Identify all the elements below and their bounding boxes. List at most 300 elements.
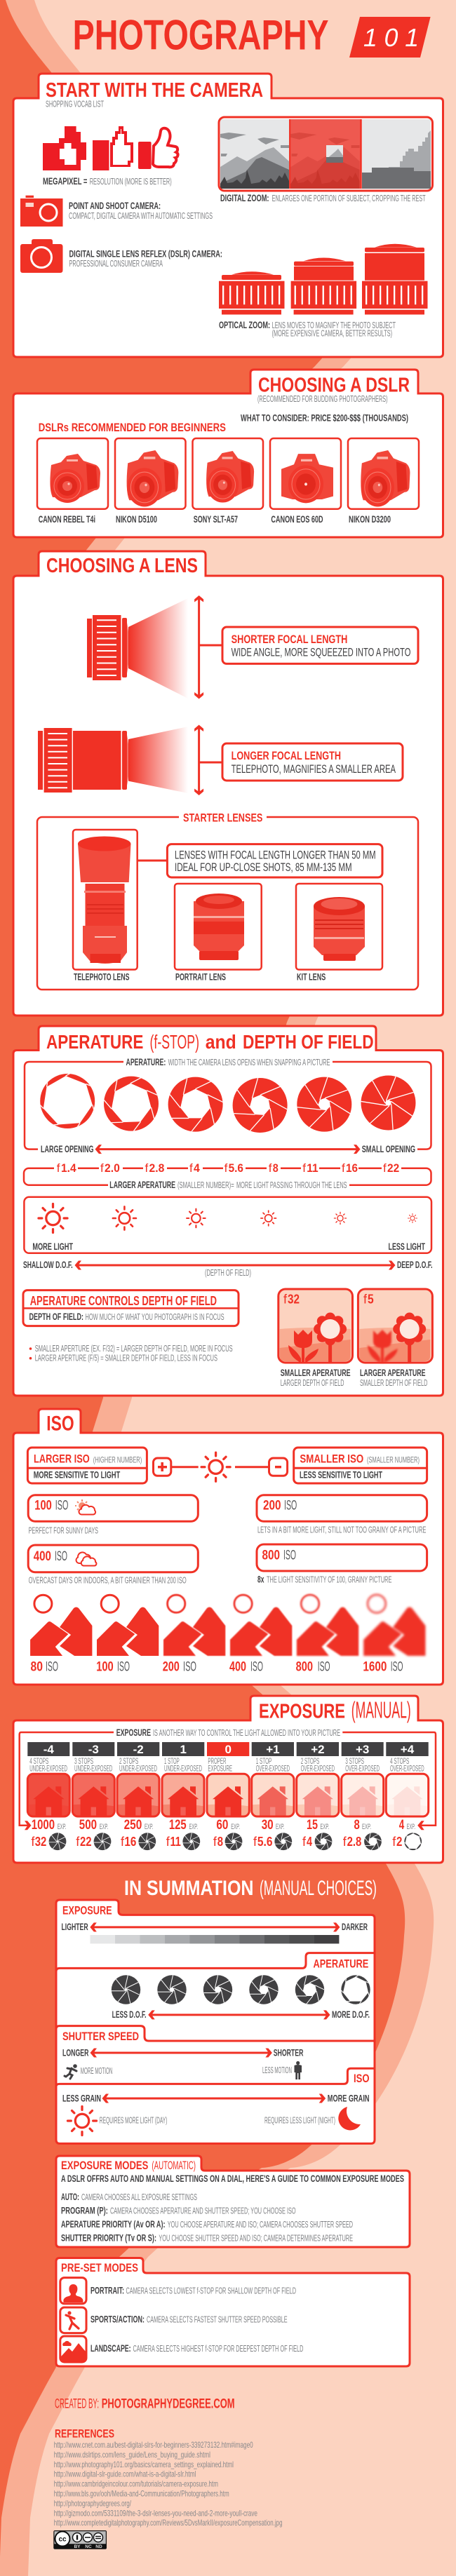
text: sports: SPORTS/ACTION:	[90, 2314, 145, 2324]
box: aperture controls depth of field	[23, 1290, 239, 1326]
diagram: long focal length	[38, 725, 222, 795]
section: exposure	[62, 1903, 368, 1943]
flower captions: LARGER DEPTH OF FIELD	[281, 1377, 344, 1388]
panel: summary of manual choices	[55, 1899, 376, 2145]
f-stop row with aperture icons: 2	[396, 1835, 402, 1849]
license badge: ND	[95, 2544, 102, 2549]
camera card: Nikon D5100	[115, 438, 185, 525]
panel: pre-set modes	[56, 2258, 410, 2366]
optical zoom caption	[219, 320, 396, 338]
stop descriptions: OVER-EXPOSED	[345, 1764, 380, 1774]
connector and callout: lens focal length	[138, 844, 382, 877]
icon: DSLR camera	[20, 239, 63, 273]
section: ISO: REQUIRES LESS LIGHT (NIGHT)	[264, 2115, 335, 2125]
stop descriptions: UNDER-EXPOSED	[164, 1764, 202, 1774]
megapixel caption: MEGAPIXEL =	[43, 176, 87, 187]
stop labels: -4	[43, 1743, 54, 1756]
shutter speeds: 60	[216, 1818, 228, 1833]
frame: exposure definition with arrows	[20, 1727, 436, 1830]
title: PHOTOGRAPHY	[73, 12, 329, 59]
shutter speeds: 30	[262, 1818, 274, 1833]
illustration: 80 ISO sample	[30, 1595, 92, 1674]
telephoto lens photo	[73, 830, 138, 969]
arrow: depth of field: SHALLOW D.O.F.	[23, 1260, 73, 1270]
heading: EXPOSURE	[259, 1700, 345, 1722]
f-stop row with aperture icons: f	[253, 1835, 257, 1849]
shutter speeds: EXP.	[276, 1823, 285, 1831]
stop descriptions: PROPER	[208, 1756, 227, 1766]
section: aperture: LESS D.O.F.	[112, 2009, 146, 2020]
text: point and shoot: POINT AND SHOOT CAMERA:	[69, 201, 161, 211]
f-stop row with aperture icons: 8	[217, 1835, 223, 1849]
icon: plus, sun, minus connector	[153, 1452, 288, 1481]
frame: aperture definition: WIDTH THE CAMERA LENS OPENS WHEN SNAPPING A PICTURE	[168, 1057, 330, 1067]
stop descriptions: UNDER-EXPOSED	[29, 1764, 67, 1774]
f-stop scale: f	[224, 1161, 228, 1175]
panel: starter lenses	[37, 811, 418, 990]
f-stop row with aperture icons: f	[302, 1835, 307, 1849]
box: smaller ISO	[294, 1448, 427, 1483]
f-stop row with aperture icons: f	[76, 1835, 80, 1849]
heading	[259, 1697, 411, 1722]
icon: moon	[338, 2107, 361, 2130]
illustration: 1600 ISO sample: ISO	[391, 1659, 403, 1674]
stop descriptions: OVER-EXPOSED	[390, 1764, 424, 1774]
diagram: short focal length	[87, 595, 222, 699]
illustration: 200 ISO sample: ISO	[183, 1659, 196, 1674]
references heading: REFERENCES	[55, 2427, 114, 2441]
illustration: f5 flower: f	[363, 1293, 368, 1307]
text: portrait	[90, 2285, 296, 2295]
illustration: 800 ISO sample	[296, 1595, 358, 1674]
text: portrait: PORTRAIT:	[90, 2285, 124, 2295]
shutter speeds: EXP.	[320, 1823, 329, 1831]
icon: point and shoot camera	[20, 196, 63, 227]
f-stop scale: LARGER APERATURE	[109, 1180, 175, 1190]
optical zoom caption: OPTICAL ZOOM:	[219, 320, 270, 330]
card: 800 ISO: 8x	[257, 1574, 264, 1585]
heading: ISO	[46, 1412, 74, 1435]
credit: PHOTOGRAPHYDEGREE.COM	[102, 2396, 235, 2411]
shutter speeds: EXP.	[189, 1823, 198, 1831]
box: aperture controls depth of field: DEPTH OF FIELD:	[29, 1311, 83, 1322]
icon: running person	[65, 2064, 77, 2079]
mode definitions: CAMERA CHOOSES ALL EXPOSURE SETTINGS	[81, 2192, 197, 2202]
text: point and shoot: COMPACT, DIGITAL CAMERA WITH AUTOMATIC SETTINGS	[69, 210, 213, 221]
panel: start with the camera	[13, 74, 443, 357]
illustration: 80 ISO sample: ISO	[46, 1659, 58, 1674]
f-stop row with aperture icons	[31, 1833, 422, 1850]
section: ISO: LESS GRAIN	[62, 2093, 101, 2103]
flower captions: SMALLER APERATURE	[281, 1368, 351, 1378]
license badge: BY	[74, 2544, 81, 2549]
stop descriptions: 2 STOPS	[301, 1756, 319, 1766]
stop descriptions: OVER-EXPOSED	[256, 1764, 290, 1774]
icon: sun and cloud	[75, 1499, 95, 1515]
section: exposure: DARKER	[342, 1922, 368, 1932]
text: landscape	[90, 2343, 303, 2354]
card: 200 ISO: 200	[263, 1499, 281, 1513]
stop labels: 0	[224, 1743, 232, 1756]
camera card: Sony SLT-A57: SONY SLT-A57	[194, 514, 238, 525]
box: aperture controls depth of field: APERATURE CONTROLS DEPTH OF FIELD	[30, 1294, 217, 1308]
stop descriptions: 2 STOPS	[119, 1756, 138, 1766]
section: shutter speed: LONGER	[62, 2047, 89, 2058]
frame: aperture definition	[25, 1057, 431, 1149]
arrow: depth of field: (DEPTH OF FIELD)	[205, 1267, 251, 1278]
shutter speeds: EXP.	[145, 1823, 153, 1831]
icon: clouds	[76, 1552, 96, 1565]
portrait lens photo	[175, 884, 262, 969]
illustration: 800 ISO sample: 800	[296, 1659, 313, 1674]
section: shutter speed	[56, 2026, 375, 2079]
card: 200 ISO	[257, 1495, 427, 1535]
illustration: 100 ISO sample: 100	[96, 1659, 114, 1674]
box: larger ISO: MORE SENSITIVE TO LIGHT	[34, 1469, 120, 1480]
stop descriptions: OVER-EXPOSED	[301, 1764, 335, 1774]
stop descriptions: 4 STOPS	[29, 1756, 48, 1766]
camera card: Canon Rebel T4i	[37, 438, 108, 525]
f-stop scale: 1.4	[61, 1161, 76, 1175]
callout: longer focal length	[222, 743, 403, 781]
f-stop row with aperture icons: 5.6	[257, 1835, 272, 1849]
camera card: Canon Rebel T4i: CANON REBEL T4i	[39, 514, 95, 525]
f-stop scale: f	[342, 1161, 345, 1175]
panel: exposure manual	[13, 1694, 444, 1864]
references list: http://www.photography101.org/basics/camera_settings_explained.html	[54, 2460, 234, 2469]
panel: choosing a lens	[13, 551, 443, 1016]
mode definitions: SHUTTER PRIORITY (Tv OR S):	[61, 2233, 156, 2244]
bullet list: LARGER APERTURE (F/5) = SMALLER DEPTH OF FIELD, LESS IN FOCUS	[35, 1353, 217, 1363]
references list: http://www.dslrtips.com/lens_guide/Lens_buying_guide.shtml	[54, 2450, 210, 2460]
illustration: 1600 ISO sample	[363, 1595, 425, 1674]
f-stop scale: 8	[273, 1161, 279, 1175]
illustration: f32 flower: f	[283, 1293, 288, 1307]
f-stop scale: f	[145, 1161, 149, 1175]
icon: smooth thumbs up	[138, 128, 178, 169]
illustration: 100 ISO sample	[96, 1595, 159, 1674]
credit: CREATED BY:	[55, 2396, 99, 2411]
heading: PRE-SET MODES	[61, 2261, 138, 2274]
heading: START WITH THE CAMERA	[46, 79, 263, 102]
heading: CHOOSING A LENS	[46, 555, 198, 577]
lens labels: PORTRAIT LENS	[175, 972, 226, 982]
shutter speeds: EXP.	[407, 1823, 415, 1831]
icon: portrait	[60, 2278, 86, 2304]
references list: http://www.cnet.com.au/best-digital-slrs-for-beginners-339273132.htm#image0	[54, 2440, 253, 2450]
camera card: Canon EOS 60D: CANON EOS 60D	[271, 514, 323, 525]
f-stop scale: 5.6	[229, 1161, 243, 1175]
mode definitions: AUTO:	[61, 2192, 79, 2202]
stop descriptions: UNDER-EXPOSED	[119, 1764, 157, 1774]
sub heading: recommended DSLRs: DSLRs RECOMMENDED FOR BEGINNERS	[39, 421, 226, 434]
callout: shorter focal length: SHORTER FOCAL LENGTH	[232, 633, 347, 646]
illustration: f5 flower: 5	[368, 1293, 374, 1307]
f-stop scale: 16	[346, 1161, 358, 1175]
f-stop scale: f	[189, 1161, 193, 1175]
shutter speeds: 8	[354, 1818, 360, 1833]
f-stop row with aperture icons: f	[343, 1835, 347, 1849]
heading: EXPOSURE MODES	[61, 2159, 148, 2172]
icon row: aperture openings	[40, 1074, 415, 1133]
stop descriptions: 4 STOPS	[390, 1756, 409, 1766]
card: 100 ISO: ISO	[55, 1499, 68, 1513]
section: ISO: REQUIRES MORE LIGHT (DAY)	[100, 2115, 167, 2125]
f-stop scale: 4	[194, 1161, 200, 1175]
card: 400 ISO	[28, 1545, 198, 1586]
card: 200 ISO: ISO	[284, 1499, 297, 1513]
f-stop row with aperture icons: f	[392, 1835, 396, 1849]
stop labels: +1	[266, 1743, 280, 1756]
heading: CHOOSING A DSLR	[258, 375, 410, 397]
f-stop scale: MORE LIGHT PASSING THROUGH THE LENS	[236, 1180, 347, 1190]
f-stop scale: f	[100, 1161, 104, 1175]
callout: shorter focal length	[222, 627, 418, 663]
section: shutter speed: LESS MOTION	[262, 2065, 292, 2075]
credit	[55, 2396, 235, 2411]
illustration: f5 flower	[358, 1289, 432, 1363]
illustration: 400 ISO sample	[229, 1595, 292, 1674]
f-stop row with aperture icons: f	[213, 1835, 217, 1849]
mode definitions: PROGRAM (P):	[61, 2206, 108, 2216]
heading: in summation: IN SUMMATION	[124, 1877, 254, 1900]
heading: STARTER LENSES	[183, 811, 262, 824]
card: 400 ISO: ISO	[55, 1549, 67, 1564]
heading: (AUTOMATIC)	[152, 2159, 196, 2172]
f-stop row with aperture icons: 4	[307, 1835, 312, 1849]
shutter speeds	[32, 1818, 415, 1833]
lens labels: TELEPHOTO LENS	[74, 972, 129, 982]
section: ISO: MORE GRAIN	[328, 2093, 369, 2103]
icon: pixel thumbs up	[43, 126, 86, 170]
references list: http://www.completedigitalphotography.com/Reviews/5DvsMarkII/exposureCompensation.jpg	[54, 2518, 282, 2528]
heading: DEPTH OF FIELD	[243, 1031, 374, 1053]
f-stop scale: f	[57, 1161, 60, 1175]
panel: aperture and depth of field	[13, 1025, 444, 1397]
box: larger ISO: LARGER ISO	[34, 1452, 90, 1466]
icon: optical zoom lens 1	[219, 271, 285, 314]
card: 800 ISO: ISO	[283, 1549, 296, 1563]
digital zoom illustration	[219, 117, 433, 191]
f-stop scale: 2.0	[105, 1161, 120, 1175]
f-stop scale: f	[302, 1161, 306, 1175]
frame: aperture definition: APERATURE:	[126, 1057, 166, 1067]
digital zoom caption: DIGITAL ZOOM:	[220, 193, 269, 203]
f-stop scale: f	[383, 1161, 387, 1175]
badge: 101: 1 0 1	[363, 23, 419, 52]
box: aperture controls depth of field: HOW MUCH OF WHAT YOU PHOTOGRAPH IS IN FOCUS	[86, 1311, 224, 1322]
shutter speeds: 500	[79, 1818, 97, 1833]
badge: 101	[349, 17, 431, 58]
card: 400 ISO: OVERCAST DAYS OR INDOORS, A BIT GRAINIER THAN 200 ISO	[29, 1575, 187, 1586]
bullet list	[29, 1343, 233, 1363]
shutter speeds: 1000	[32, 1818, 55, 1833]
megapixel caption	[43, 176, 172, 187]
references list: http://www.cambridgeincolour.com/tutorials/camera-exposure.htm	[54, 2479, 218, 2489]
illustration: 800 ISO sample: ISO	[318, 1659, 330, 1674]
section: exposure: EXPOSURE	[62, 1903, 112, 1917]
camera card: Canon EOS 60D	[270, 438, 341, 525]
illustration: 1600 ISO sample: 1600	[363, 1659, 387, 1674]
illustration: 80 ISO sample: 80	[31, 1659, 43, 1674]
stop labels: 1	[180, 1743, 187, 1756]
section: aperture: APERATURE	[313, 1957, 368, 1970]
illustration: 400 ISO sample: ISO	[250, 1659, 263, 1674]
f-stop scale: 22	[387, 1161, 399, 1175]
kit lens photo	[296, 884, 382, 969]
stop descriptions: 1 STOP	[164, 1756, 180, 1766]
lens labels	[74, 972, 326, 982]
section: shutter speed: SHUTTER SPEED	[62, 2030, 139, 2043]
mode definitions	[61, 2192, 353, 2244]
text: DSLR: DIGITAL SINGLE LENS REFLEX (DSLR) CAMERA:	[69, 248, 222, 259]
section: exposure: LIGHTER	[62, 1922, 88, 1932]
arrow: large to small opening	[41, 1144, 415, 1154]
camera card: Nikon D3200	[348, 438, 419, 525]
icon: sports	[60, 2307, 86, 2333]
f-stop row with aperture icons: 22	[80, 1835, 92, 1849]
license badge: cc	[58, 2536, 67, 2543]
box: smaller ISO: SMALLER ISO	[300, 1452, 363, 1466]
illustration: 100 ISO sample: ISO	[117, 1659, 130, 1674]
box: smaller ISO: (SMALLER NUMBER)	[367, 1455, 420, 1465]
f-stop scale: f	[269, 1161, 272, 1175]
flower captions	[281, 1368, 427, 1388]
card: 800 ISO	[257, 1544, 427, 1585]
shutter speeds: EXP.	[58, 1823, 66, 1831]
box: more light to less light: LESS LIGHT	[389, 1241, 425, 1252]
text: point and shoot	[69, 201, 213, 221]
shutter speeds: EXP.	[231, 1823, 240, 1831]
heading: in summation	[124, 1877, 377, 1900]
icon: optical zoom lens 3	[362, 244, 428, 314]
stop labels: +3	[356, 1743, 369, 1756]
heading	[46, 1031, 374, 1053]
box: smaller ISO: LESS SENSITIVE TO LIGHT	[300, 1469, 382, 1480]
references list	[54, 2440, 282, 2528]
illustration: f32 flower: 32	[288, 1293, 300, 1307]
bullet list: SMALLER APERTURE (EX. F/32) = LARGER DEPTH OF FIELD, MORE IN FOCUS	[35, 1343, 233, 1354]
box: more light to less light: MORE LIGHT	[32, 1241, 74, 1252]
text: DSLR	[69, 248, 222, 269]
megapixel caption: RESOLUTION (MORE IS BETTER)	[90, 176, 172, 187]
icon: medium pixel thumbs up	[93, 126, 133, 170]
panel: exposure modes	[56, 2156, 410, 2247]
stop descriptions: 3 STOPS	[74, 1756, 93, 1766]
exposure house tiles	[27, 1774, 429, 1816]
f-stop row with aperture icons: 2.8	[347, 1835, 361, 1849]
camera card: Nikon D5100: NIKON D5100	[116, 514, 157, 525]
text: landscape: CAMERA SELECTS HIGHEST f-STOP FOR DEEPEST DEPTH OF FIELD	[133, 2343, 303, 2354]
f-stop row with aperture icons: 16	[124, 1835, 136, 1849]
stop descriptions: 1 STOP	[256, 1756, 271, 1766]
card: 100 ISO	[28, 1495, 198, 1536]
license badge	[53, 2530, 107, 2549]
f-stop row with aperture icons: f	[166, 1835, 170, 1849]
panel: choosing a DSLR	[13, 370, 443, 537]
stop labels: +4	[401, 1743, 415, 1756]
box: more light to less light	[24, 1197, 431, 1253]
f-stop row with aperture icons: f	[31, 1835, 35, 1849]
box: larger ISO: (HIGHER NUMBER)	[93, 1455, 142, 1465]
text: landscape: LANDSCAPE:	[90, 2343, 131, 2354]
f-stop scale: (SMALLER NUMBER)=	[177, 1180, 234, 1190]
text: DSLR: PROFESSIONAL CONSUMER CAMERA	[69, 258, 163, 269]
card: 800 ISO: 800	[262, 1549, 280, 1563]
f-stop row with aperture icons: 11	[170, 1835, 181, 1849]
section: ISO: ISO	[354, 2072, 369, 2085]
text: sports	[90, 2314, 288, 2324]
stop labels	[27, 1742, 429, 1756]
text: sports: CAMERA SELECTS FASTEST SHUTTER SPEED POSSIBLE	[147, 2314, 288, 2324]
shutter speeds: EXP.	[362, 1823, 371, 1831]
f-stop row with aperture icons: 32	[35, 1835, 46, 1849]
heading: and	[206, 1031, 236, 1053]
stop descriptions: EXPOSURE	[208, 1764, 232, 1774]
card: 400 ISO: 400	[34, 1549, 51, 1564]
lens labels: KIT LENS	[297, 972, 326, 982]
shutter speeds: 125	[169, 1818, 187, 1833]
f-stop scale: 11	[307, 1161, 318, 1175]
panel: ISO	[13, 1409, 443, 1685]
arrow: large to small opening: LARGE OPENING	[41, 1144, 94, 1154]
section: ISO	[56, 2068, 375, 2136]
box: larger ISO	[27, 1448, 147, 1483]
illustration: f32 flower	[279, 1289, 352, 1363]
f-stop row with aperture icons: f	[121, 1835, 125, 1849]
illustration: 200 ISO sample: 200	[163, 1659, 180, 1674]
f-stop scale: 2.8	[149, 1161, 164, 1175]
mode definitions: CAMERA CHOOSES APERATURE AND SHUTTER SPEED; YOU CHOOSE ISO	[110, 2206, 296, 2216]
stop descriptions	[29, 1756, 424, 1774]
section: aperture: MORE D.O.F.	[332, 2009, 370, 2020]
section: aperture	[58, 1952, 373, 2020]
camera card: Nikon D3200: NIKON D3200	[349, 514, 391, 525]
icon: optical zoom lens 2	[291, 257, 356, 314]
heading: (f-STOP)	[150, 1031, 199, 1053]
digital zoom caption	[220, 193, 426, 203]
shutter speeds: EXP.	[100, 1823, 108, 1831]
arrow: depth of field: DEEP D.O.F.	[397, 1260, 432, 1270]
section: shutter speed: SHORTER	[274, 2047, 304, 2058]
license badge: NC	[85, 2544, 92, 2549]
camera card: Sony SLT-A57	[192, 438, 263, 525]
references list: http://www.digital-slr-guide.com/what-is-a-digital-slr.html	[54, 2469, 196, 2479]
illustration: 400 ISO sample: 400	[229, 1659, 246, 1674]
illustration: 200 ISO sample	[163, 1595, 225, 1674]
stop descriptions: UNDER-EXPOSED	[74, 1764, 112, 1774]
shutter speeds: 250	[124, 1818, 142, 1833]
shutter speeds: 15	[307, 1818, 318, 1833]
references list: http://photographydegrees.org/	[54, 2498, 131, 2508]
stop labels: +2	[311, 1743, 325, 1756]
subheading: SHOPPING VOCAB LIST	[46, 98, 104, 109]
heading: APERATURE	[46, 1031, 143, 1053]
callout: longer focal length: LONGER FOCAL LENGTH	[232, 749, 341, 762]
icon: landscape	[60, 2336, 86, 2362]
card: 100 ISO: 100	[34, 1499, 52, 1513]
mode definitions: APERATURE PRIORITY (Av OR A):	[61, 2219, 166, 2230]
icon: standing person	[295, 2061, 302, 2079]
connector and callout: lens focal length: IDEAL FOR UP-CLOSE SHOTS, 85 MM-135 MM	[175, 861, 352, 874]
references list: http://www.bls.gov/ooh/Media-and-Communication/Photographers.htm	[54, 2488, 229, 2498]
section: shutter speed: MORE MOTION	[81, 2065, 112, 2076]
f-stop scale	[24, 1161, 431, 1190]
card: 100 ISO: PERFECT FOR SUNNY DAYS	[29, 1525, 98, 1536]
text: portrait: CAMERA SELECTS LOWEST f-STOP FOR SHALLOW DEPTH OF FIELD	[126, 2285, 296, 2295]
arrow: large to small opening: SMALL OPENING	[362, 1144, 415, 1154]
arrow: depth of field	[23, 1260, 432, 1278]
